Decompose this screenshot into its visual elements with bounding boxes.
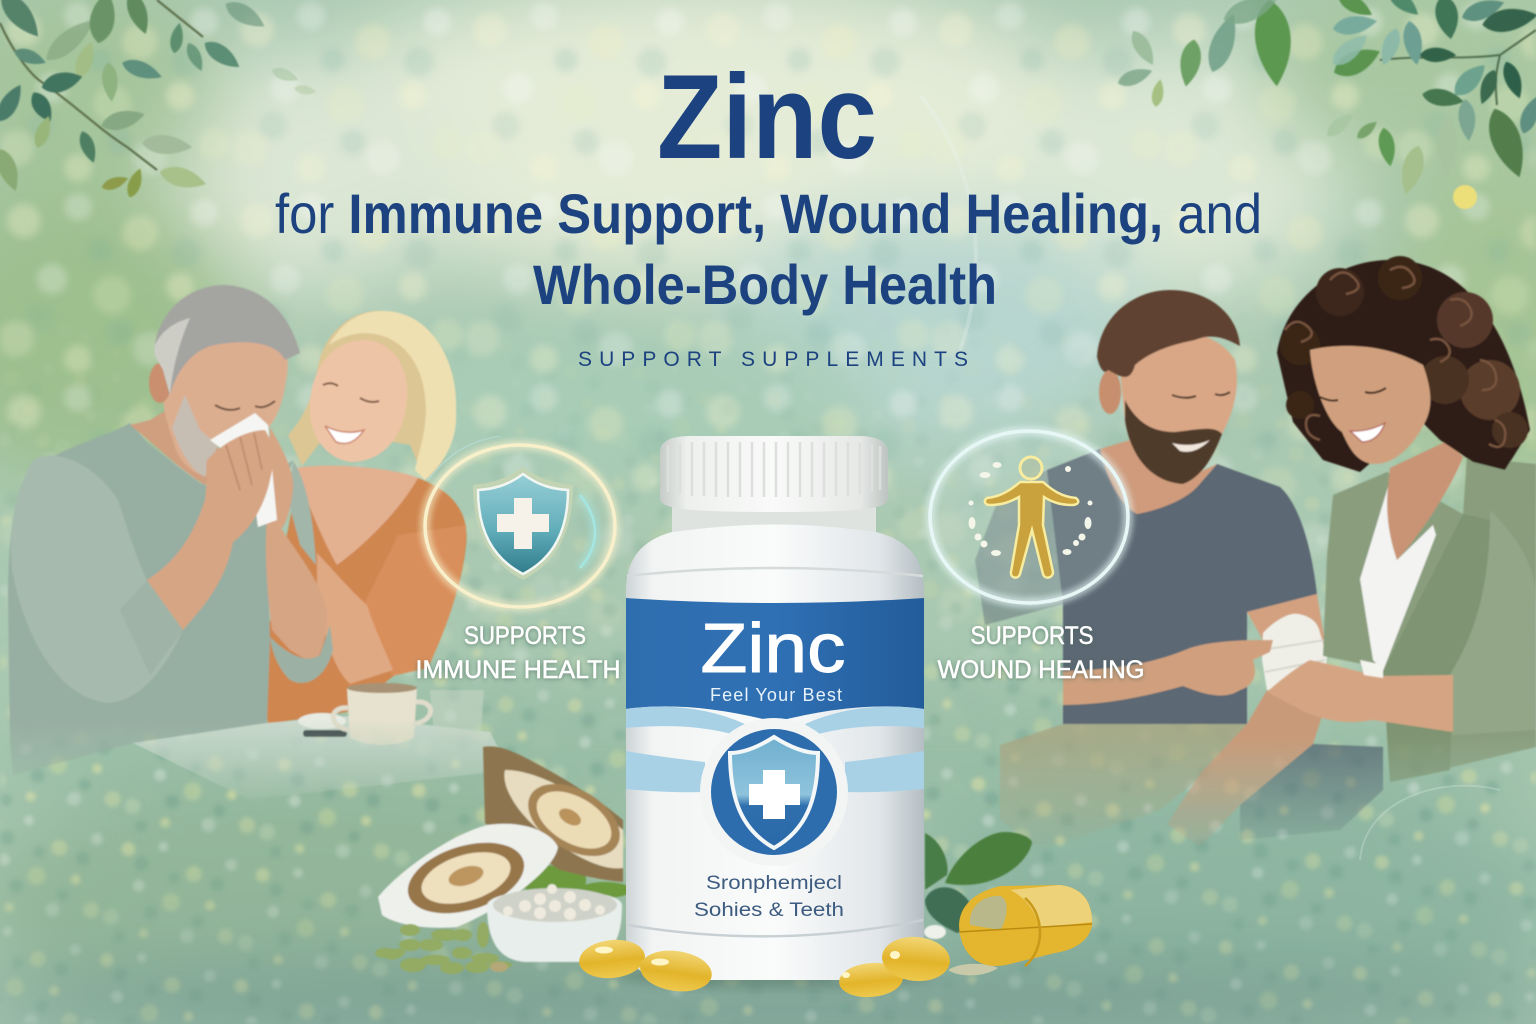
woman: orange top <box>260 468 467 724</box>
bottle <box>615 436 935 987</box>
bottle body <box>626 524 924 980</box>
man: second hand and forearm <box>266 427 327 665</box>
herb leaves <box>924 832 1032 939</box>
white plate <box>378 824 558 928</box>
bottle shadow <box>615 963 935 987</box>
man: head <box>1120 336 1238 434</box>
woman: face <box>310 340 407 462</box>
icon: body ring <box>930 431 1128 603</box>
brand name: Zinc <box>700 609 846 687</box>
label blue band <box>626 598 924 722</box>
label small text: Sronphemjecl <box>706 873 842 894</box>
label light stripes <box>626 707 745 735</box>
label: supports wound healing: WOUND HEALING <box>938 656 1144 684</box>
label: supports wound healing <box>938 622 1144 684</box>
people: man with tissue and smiling woman <box>8 285 510 800</box>
man: hand and forearm <box>147 430 273 630</box>
woman: hair <box>288 311 456 480</box>
green seeds behind <box>521 864 631 898</box>
man: hand and arm <box>1063 640 1273 705</box>
man: forearm with hair <box>1167 690 1323 847</box>
woman: hand on arm <box>1267 660 1453 732</box>
bandage <box>1262 614 1327 690</box>
table <box>133 716 510 800</box>
title: Zinc <box>657 50 877 184</box>
foliage: top right branch <box>1115 0 1536 197</box>
woman: face <box>1310 346 1430 464</box>
man: head <box>162 342 288 473</box>
label small text: Sohies & Teeth <box>694 900 844 921</box>
man: sweater right sleeve <box>288 460 316 565</box>
foliage: top left branch <box>0 0 317 200</box>
man: t-shirt <box>1047 449 1317 724</box>
man: hair <box>1097 290 1240 377</box>
bottle cap <box>660 436 888 542</box>
woman: jacket <box>1323 457 1536 782</box>
man: sweater torso <box>8 423 293 775</box>
seeds <box>375 922 512 974</box>
man: beard <box>1125 400 1222 484</box>
woman: forearm <box>317 553 393 684</box>
label: supports immune health: SUPPORTS <box>464 622 586 650</box>
badge <box>700 718 848 866</box>
softgels and capsule <box>577 885 1092 1000</box>
woman: neck and chest <box>295 466 418 565</box>
slogan: Feel Your Best <box>710 685 842 705</box>
woman: jeans <box>1240 744 1383 840</box>
food: plate, slices, seeds and bowl <box>375 746 632 974</box>
icon: immune shield ring <box>425 436 615 607</box>
coffee cups and saucer <box>298 683 484 745</box>
subtitle line 1: for Immune Support, Wound Healing, and <box>275 182 1262 245</box>
stacked slices <box>483 746 623 882</box>
tagline: SUPPORT SUPPLEMENTS <box>578 348 968 371</box>
tissue <box>210 413 277 527</box>
label: supports wound healing: SUPPORTS <box>970 622 1094 650</box>
label: supports immune health <box>416 622 620 684</box>
man: neck <box>130 411 219 485</box>
subtitle line 2: Whole-Body Health <box>533 253 997 316</box>
woman: neck and chest <box>1387 441 1463 560</box>
woman: curly hair <box>1277 256 1530 472</box>
man: trousers <box>1000 724 1246 824</box>
woman: hair front <box>329 311 456 480</box>
label: supports immune health: IMMUNE HEALTH <box>416 656 620 684</box>
man: sweater arm <box>11 456 183 703</box>
bowl of pills <box>487 890 622 962</box>
man: upper arm <box>1247 594 1327 656</box>
man: hair <box>154 285 300 395</box>
people: bearded man and curly-haired woman <box>975 256 1536 850</box>
woman: white shirt <box>1360 487 1436 671</box>
